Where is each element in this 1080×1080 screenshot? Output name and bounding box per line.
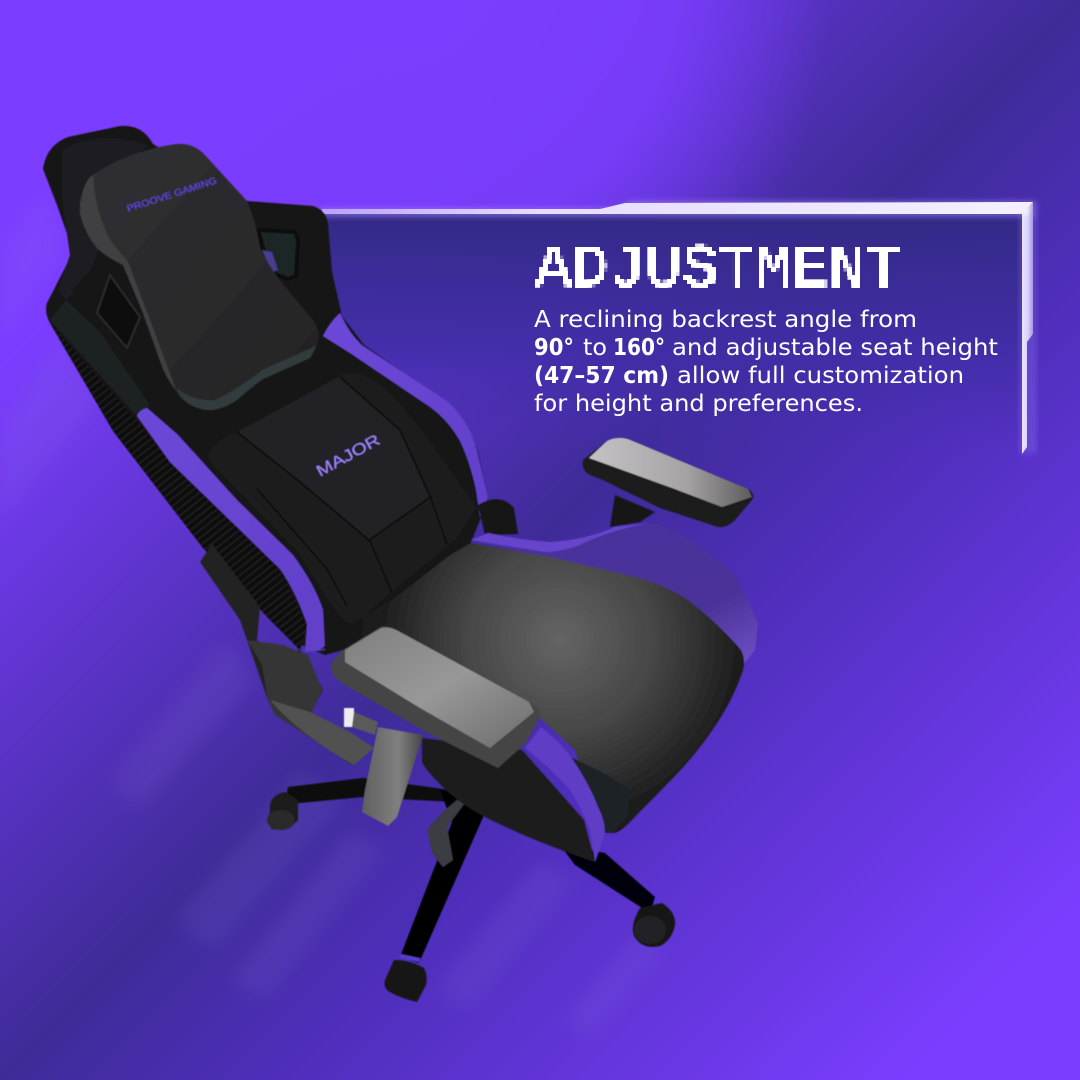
neck pillow [80, 144, 319, 410]
base: left leg [285, 778, 455, 805]
seat hinge [478, 499, 518, 535]
far armrest stem [610, 495, 655, 527]
base: centre and bottom leg [400, 790, 484, 963]
body text: 160° [613, 333, 665, 361]
lumbar cushion [209, 373, 476, 623]
inner back cavity [72, 262, 185, 405]
body text: and adjustable seat height [672, 333, 998, 361]
backrest shell [43, 126, 488, 655]
far armrest [583, 438, 753, 527]
panel frame: bright neon corner line [322, 202, 1037, 454]
seat purple bolster [471, 523, 758, 665]
caster: bottom [385, 954, 427, 1002]
near armrest [331, 627, 540, 768]
purple band: left [137, 408, 325, 652]
motion blur streaks [0, 190, 665, 1040]
purple band: right [323, 313, 488, 517]
gas lever [427, 800, 465, 867]
metal belt slot: right [258, 230, 298, 279]
seat front purple strip [525, 727, 605, 862]
body text: 90° [534, 333, 574, 361]
chair [43, 126, 758, 1002]
body text: for height and preferences. [534, 389, 863, 417]
body text: A reclining backrest angle from [534, 305, 917, 333]
backrest shading highlight [58, 138, 150, 300]
metal belt slot: left [97, 275, 140, 348]
body text: to [583, 333, 607, 361]
seat front panel left [422, 738, 595, 862]
back side stripes [50, 323, 307, 650]
caster: right [633, 903, 675, 947]
panel: text background [320, 201, 1036, 458]
rear mechanism bracket [200, 544, 378, 765]
side panel dark band [50, 300, 150, 416]
body text: (47–57 cm) [534, 361, 669, 389]
base: right leg [560, 845, 655, 913]
near armrest post [362, 727, 423, 826]
lumbar logo text: MAJOR [314, 432, 383, 480]
seat front dark [570, 757, 630, 833]
body text [534, 305, 998, 417]
pillow logo text: PROOVE GAMING [126, 175, 218, 215]
body text: allow full customization [677, 361, 964, 389]
panel frame: top glow [320, 201, 1036, 217]
seat cushion [320, 543, 744, 833]
title: ADJUSTMENT [535, 237, 902, 305]
caster: left [267, 792, 298, 830]
